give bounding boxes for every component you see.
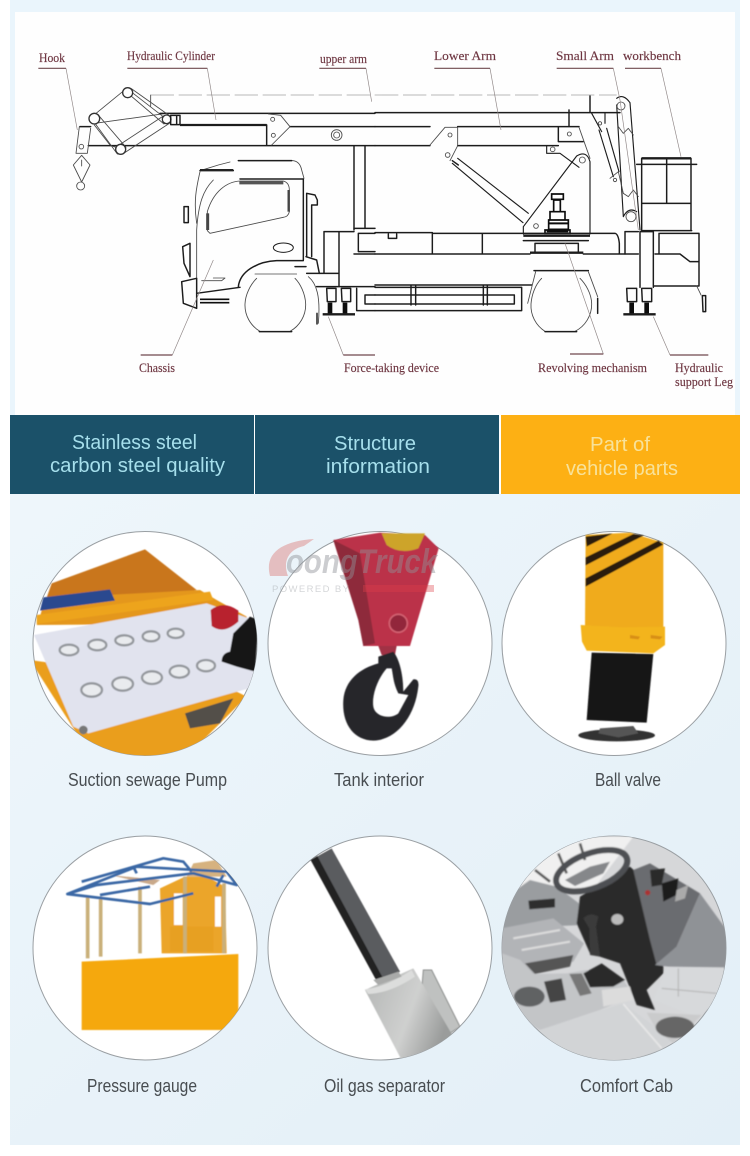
watermark: POWERED BY: [272, 584, 350, 595]
tab: structure information: Structure: [334, 433, 416, 455]
labels: diagram part names: Chassis: [139, 360, 175, 375]
labels: diagram part names: Hook: [39, 50, 65, 65]
caption: Oil gas separator: [324, 1075, 445, 1096]
watermark: oongTruck: [286, 543, 439, 581]
caption: Comfort Cab: [580, 1075, 673, 1096]
labels: diagram part names: Small Arm: [556, 48, 614, 63]
labels: diagram part names: Lower Arm: [434, 48, 496, 63]
part: workbench basket: [33, 836, 257, 1060]
caption: Ball valve: [595, 769, 661, 790]
tab: stainless steel: carbon steel quality: [50, 455, 225, 477]
page frame background: [10, 0, 740, 415]
part: comfort cab interior: [502, 836, 727, 1063]
tab: part of vehicle parts: Part of: [590, 434, 650, 456]
labels: diagram part names: [39, 48, 733, 389]
labels: diagram part names: workbench: [623, 48, 681, 63]
caption: Tank interior: [334, 769, 424, 790]
part: hydraulic cylinder: [268, 836, 492, 1063]
caption: Pressure gauge: [87, 1075, 197, 1096]
tab: part of vehicle parts: [501, 415, 740, 494]
watermark: [269, 539, 439, 595]
panel: vehicle parts: [10, 494, 740, 1145]
labels: diagram part names: upper arm: [320, 51, 367, 66]
tab: part of vehicle parts: vehicle parts: [566, 458, 678, 480]
labels: diagram part names: Revolving mechanism: [538, 360, 647, 375]
drawing: truck line art: [38, 68, 708, 355]
tabs bar: [10, 415, 740, 494]
cab: [195, 161, 304, 278]
part: support leg: [502, 532, 726, 756]
part: control panel: [30, 532, 258, 757]
panel: truck structure diagram: [15, 12, 735, 415]
leader lines left: [66, 68, 372, 355]
tab: stainless steel: [10, 415, 254, 494]
tab: structure information: [255, 415, 499, 494]
part: hook: [268, 532, 492, 756]
labels: diagram part names: Hydraulic Cylinder: [127, 48, 216, 63]
caption: Suction sewage Pump: [68, 769, 227, 790]
labels: diagram part names: Force-taking device: [344, 360, 439, 375]
labels: diagram part names: support Leg: [675, 374, 733, 389]
labels: diagram part names: Hydraulic: [675, 360, 723, 375]
tab: structure information: information: [326, 456, 430, 478]
tab: stainless steel: Stainless steel: [72, 432, 197, 454]
